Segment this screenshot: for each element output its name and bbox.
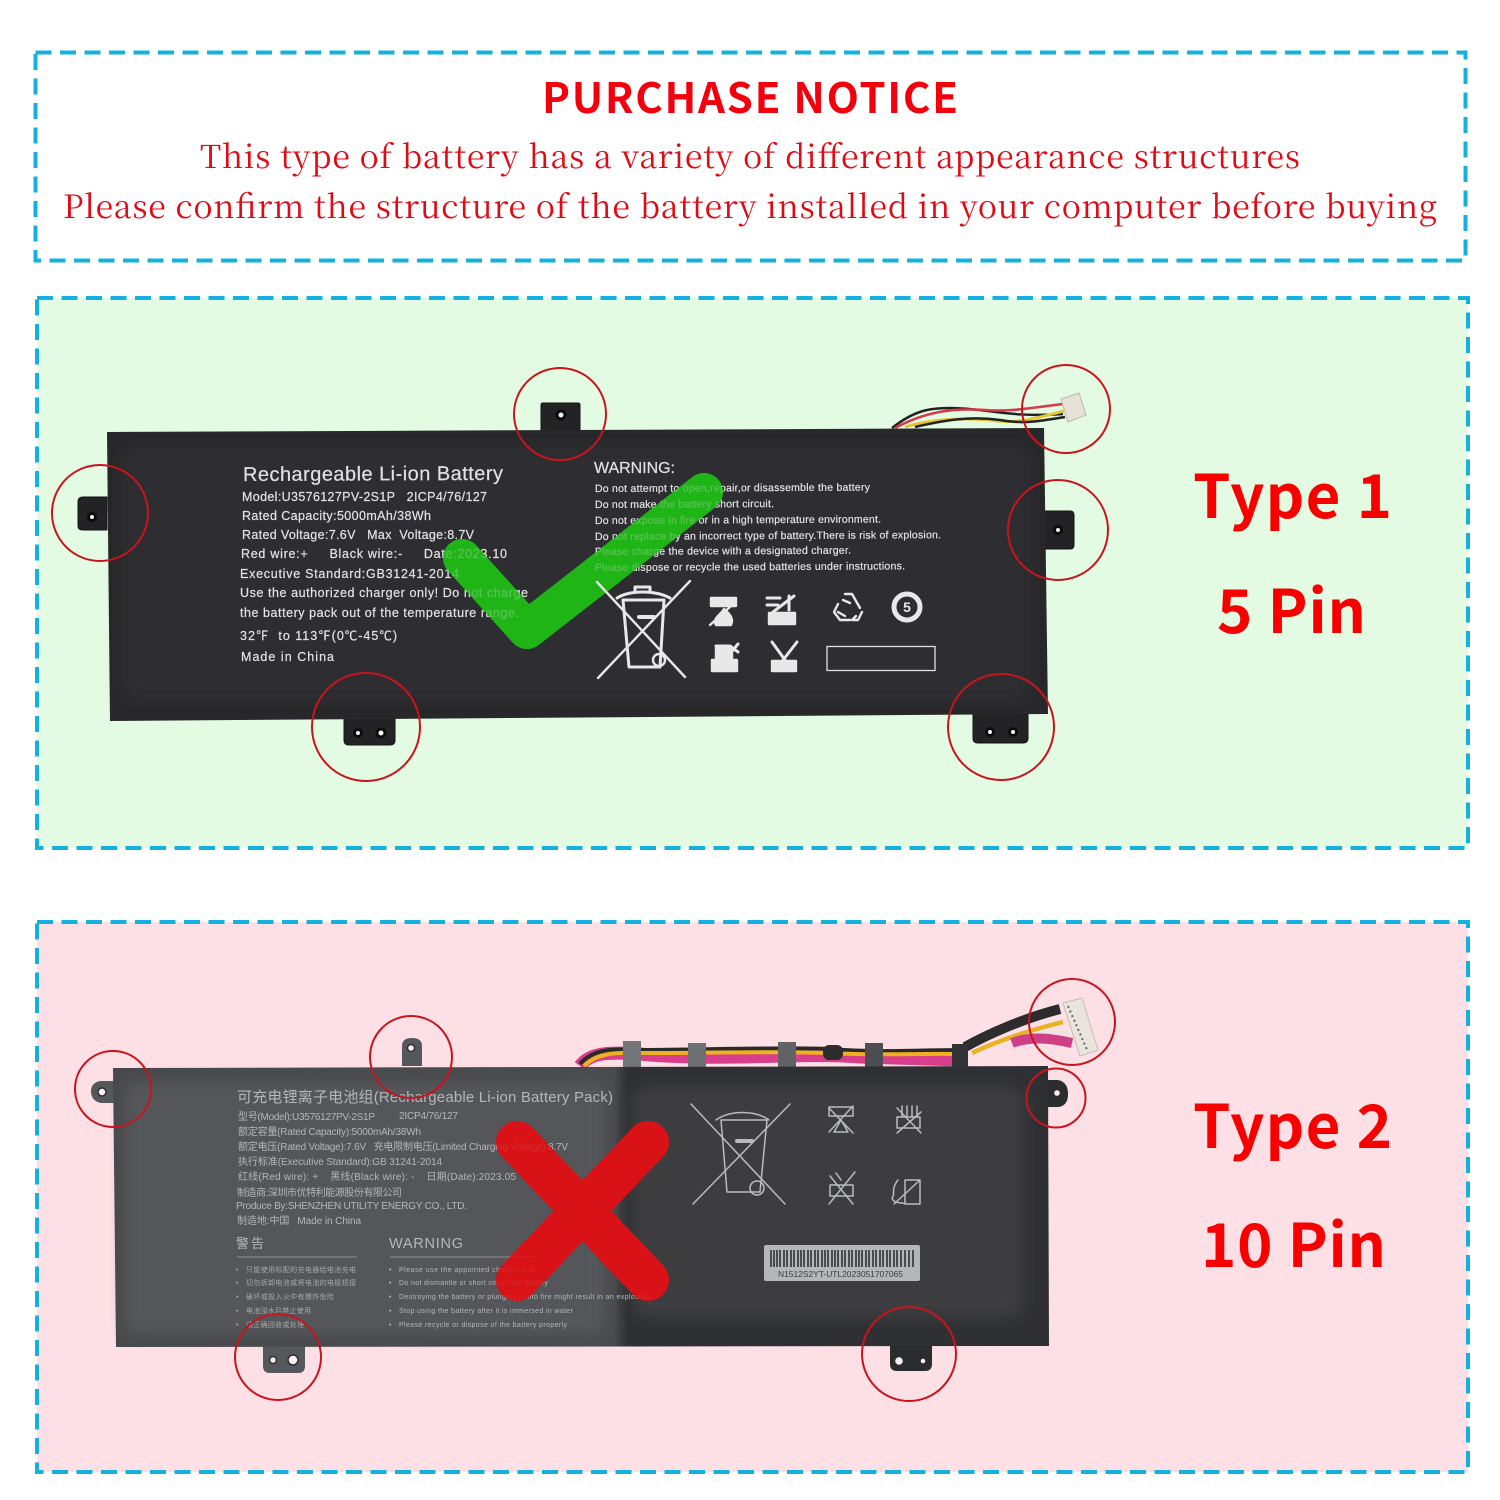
- title: PURCHASE NOTICE: [542, 65, 958, 126]
- type 2 label: Type 2: [1193, 1079, 1392, 1166]
- type 1 battery wires and connector: [892, 393, 1086, 428]
- type 2 battery wires and connector: [580, 998, 1098, 1066]
- icon: no fire: [710, 598, 736, 625]
- type 2 battery label text: 警告: [236, 1236, 264, 1251]
- type 2 english warning list: Stop using the battery after it is immersed in water: [399, 1308, 574, 1315]
- type 2 chinese warning list: 只能使用标配的充电器给电池充电: [246, 1265, 356, 1274]
- type 2 chinese warning list: •: [236, 1267, 239, 1274]
- type 1 battery body: [107, 428, 1048, 721]
- icon: no water, type 2: [892, 1180, 920, 1204]
- type 2 left soft surface: [125, 1082, 605, 1334]
- type 1 battery label text: Rechargeable Li-ion Battery: [243, 463, 503, 486]
- type 2 battery label text: [236, 1089, 613, 1252]
- icon: recycle: [834, 594, 862, 620]
- type 2 english warning list: Please use the appointed charger only: [399, 1267, 536, 1274]
- 10 pin label: 10 Pin: [1201, 1198, 1386, 1285]
- type 2 chinese warning list: •: [236, 1280, 239, 1287]
- type 1 battery soft surface: [122, 448, 1030, 700]
- icon: no puncture, type 2: [829, 1172, 855, 1204]
- type 2 chinese warning list: 请正确回收或处理: [246, 1320, 304, 1329]
- highlight circles, type 1: [52, 365, 1110, 781]
- blank label rectangle: [827, 646, 935, 670]
- green check mark base: [462, 492, 704, 630]
- type 2 english warning list: Please recycle or dispose of the battery properly: [399, 1322, 568, 1329]
- 5 pin label: 5 Pin: [1217, 564, 1366, 651]
- type 2 battery label text: 制造地:中国 Made in China: [237, 1214, 361, 1227]
- type 2 chinese warning list: 切勿拆卸电池或将电池的电极短接: [246, 1278, 356, 1287]
- barcode label: N1512S2YT-UTL2023051707065: [778, 1269, 903, 1279]
- type 2 english warning list: Destroying the battery or plunging it into fire might result in an explosion: [399, 1294, 649, 1301]
- type 1 battery label text: Made in China: [241, 650, 334, 664]
- type 1 battery warning text: Do not replace by an incorrect type of battery.There is risk of explosion.: [595, 529, 941, 543]
- type 2 chinese warning list: •: [236, 1322, 239, 1329]
- notice line 1: This type of battery has a variety of different appearance structures: [200, 132, 1300, 178]
- icon: no fire, type 2: [829, 1106, 853, 1133]
- icon: crossed-out recycle bin, type 2: [691, 1104, 790, 1204]
- type 2 battery label text: 额定电压(Rated Voltage):7.6V 充电限制电压(Limited Charging Voltage):8.7V: [238, 1140, 568, 1153]
- type 1 battery label text: Use the authorized charger only! Do not charge: [240, 586, 528, 600]
- type 2 battery label text: Produce By:SHENZHEN UTILITY ENERGY CO., LTD.: [236, 1201, 467, 1212]
- type 2 battery label text: 型号(Model):U3576127PV-2S1P: [238, 1110, 375, 1123]
- type 1 battery label text: 32℉ to 113℉(0℃-45℃): [240, 629, 397, 643]
- type 1 battery mounting tabs: [78, 403, 1074, 745]
- type 2 battery mounting tabs: [91, 1038, 1068, 1373]
- type 2 english warning list: •: [389, 1308, 392, 1315]
- red cross mark base: [517, 1142, 648, 1280]
- type 1 battery warning text: Please dispose or recycle the used batteries under instructions.: [595, 560, 905, 574]
- icon: crossed-out recycle bin: [597, 581, 690, 678]
- type 1 battery label text: Model:U3576127PV-2S1P 2ICP4/76/127: [242, 490, 487, 504]
- red cross mark tint: [517, 1142, 648, 1280]
- type 2 battery label text: 2ICP4/76/127: [399, 1111, 458, 1122]
- type 2 battery body: [113, 1066, 1049, 1347]
- type 2 english warning list: •: [389, 1322, 392, 1329]
- green check mark tint: [462, 492, 704, 630]
- notice line 2: Please confirm the structure of the battery installed in your computer before buying: [63, 182, 1437, 228]
- type 1 battery label text: [240, 463, 528, 664]
- highlight circles, type 2: [75, 979, 1115, 1401]
- type 2 battery label text: 制造商:深圳市优特利能源股份有限公司: [237, 1186, 402, 1199]
- purchase notice box: [36, 52, 1466, 260]
- type 2 battery label text: 额定容量(Rated Capacity):5000mAh/38Wh: [238, 1125, 421, 1138]
- type 2 battery label text: 执行标准(Executive Standard):GB 31241-2014: [238, 1155, 442, 1168]
- barcode label: [764, 1245, 920, 1281]
- icon: 5-year environmental mark: [894, 594, 920, 620]
- type 2 english warning list: •: [389, 1294, 392, 1301]
- type 2 chinese warning list: [236, 1265, 356, 1329]
- type 1 battery warning text: Please charge the device with a designated charger.: [595, 545, 851, 558]
- type 2 mounting holes: [98, 1044, 1060, 1366]
- type 1 battery warning text: Do not attempt to open,repair,or disassemble the battery: [595, 482, 871, 495]
- icon: no heat, type 2: [897, 1106, 921, 1133]
- type 1 mounting holes: [88, 411, 1062, 737]
- type 2 english warning list: •: [389, 1280, 392, 1287]
- type 2 english warning list: •: [389, 1267, 392, 1274]
- type 2 chinese warning list: •: [236, 1308, 239, 1315]
- icon: 5-year environmental mark: 5: [903, 599, 911, 615]
- type 2 right soft surface: [632, 1086, 1024, 1318]
- panel: type 2 battery: [37, 922, 1468, 1472]
- type 1 battery label text: Red wire:+ Black wire:- Date:2023.10: [241, 547, 507, 561]
- icon: no crush: [712, 644, 738, 671]
- type 2 battery label text: WARNING: [389, 1236, 463, 1252]
- type 1 battery warning text: Do not expose in fire or in a high temperature environment.: [595, 514, 881, 527]
- type 1 label: Type 1: [1193, 449, 1392, 536]
- type 1 battery warning text: WARNING:: [594, 460, 675, 477]
- icon: no heat: [767, 596, 795, 624]
- type 2 battery label text: 红线(Red wire): + 黑线(Black wire): - 日期(Date):2023.05: [238, 1170, 516, 1183]
- type 2 english warning list: [389, 1267, 649, 1329]
- type 1 battery warning text: Do not make the battery short circuit.: [595, 498, 774, 511]
- type 2 chinese warning list: 电池浸水后禁止使用: [246, 1306, 311, 1315]
- cable clips: [623, 1041, 968, 1067]
- type 2 english warning list: Do not dismantle or short circuit the battery: [399, 1280, 548, 1287]
- icon: no puncture: [772, 642, 797, 671]
- type 1 battery warning text: [594, 460, 941, 574]
- type 2 chinese warning list: 破坏或投入火中有爆炸危险: [246, 1292, 334, 1301]
- type 2 battery label text: 可充电锂离子电池组(Rechargeable Li-ion Battery Pack): [237, 1089, 613, 1106]
- panel: type 1 battery: [37, 298, 1468, 848]
- type 1 battery label text: Rated Voltage:7.6V Max Voltage:8.7V: [242, 528, 475, 542]
- type 1 battery label text: the battery pack out of the temperature range.: [240, 606, 519, 620]
- type 2 chinese warning list: •: [236, 1294, 239, 1301]
- type 1 battery label text: Rated Capacity:5000mAh/38Wh: [242, 509, 431, 523]
- type 1 battery label text: Executive Standard:GB31241-2014: [240, 567, 459, 581]
- warning dividers: [237, 1256, 535, 1258]
